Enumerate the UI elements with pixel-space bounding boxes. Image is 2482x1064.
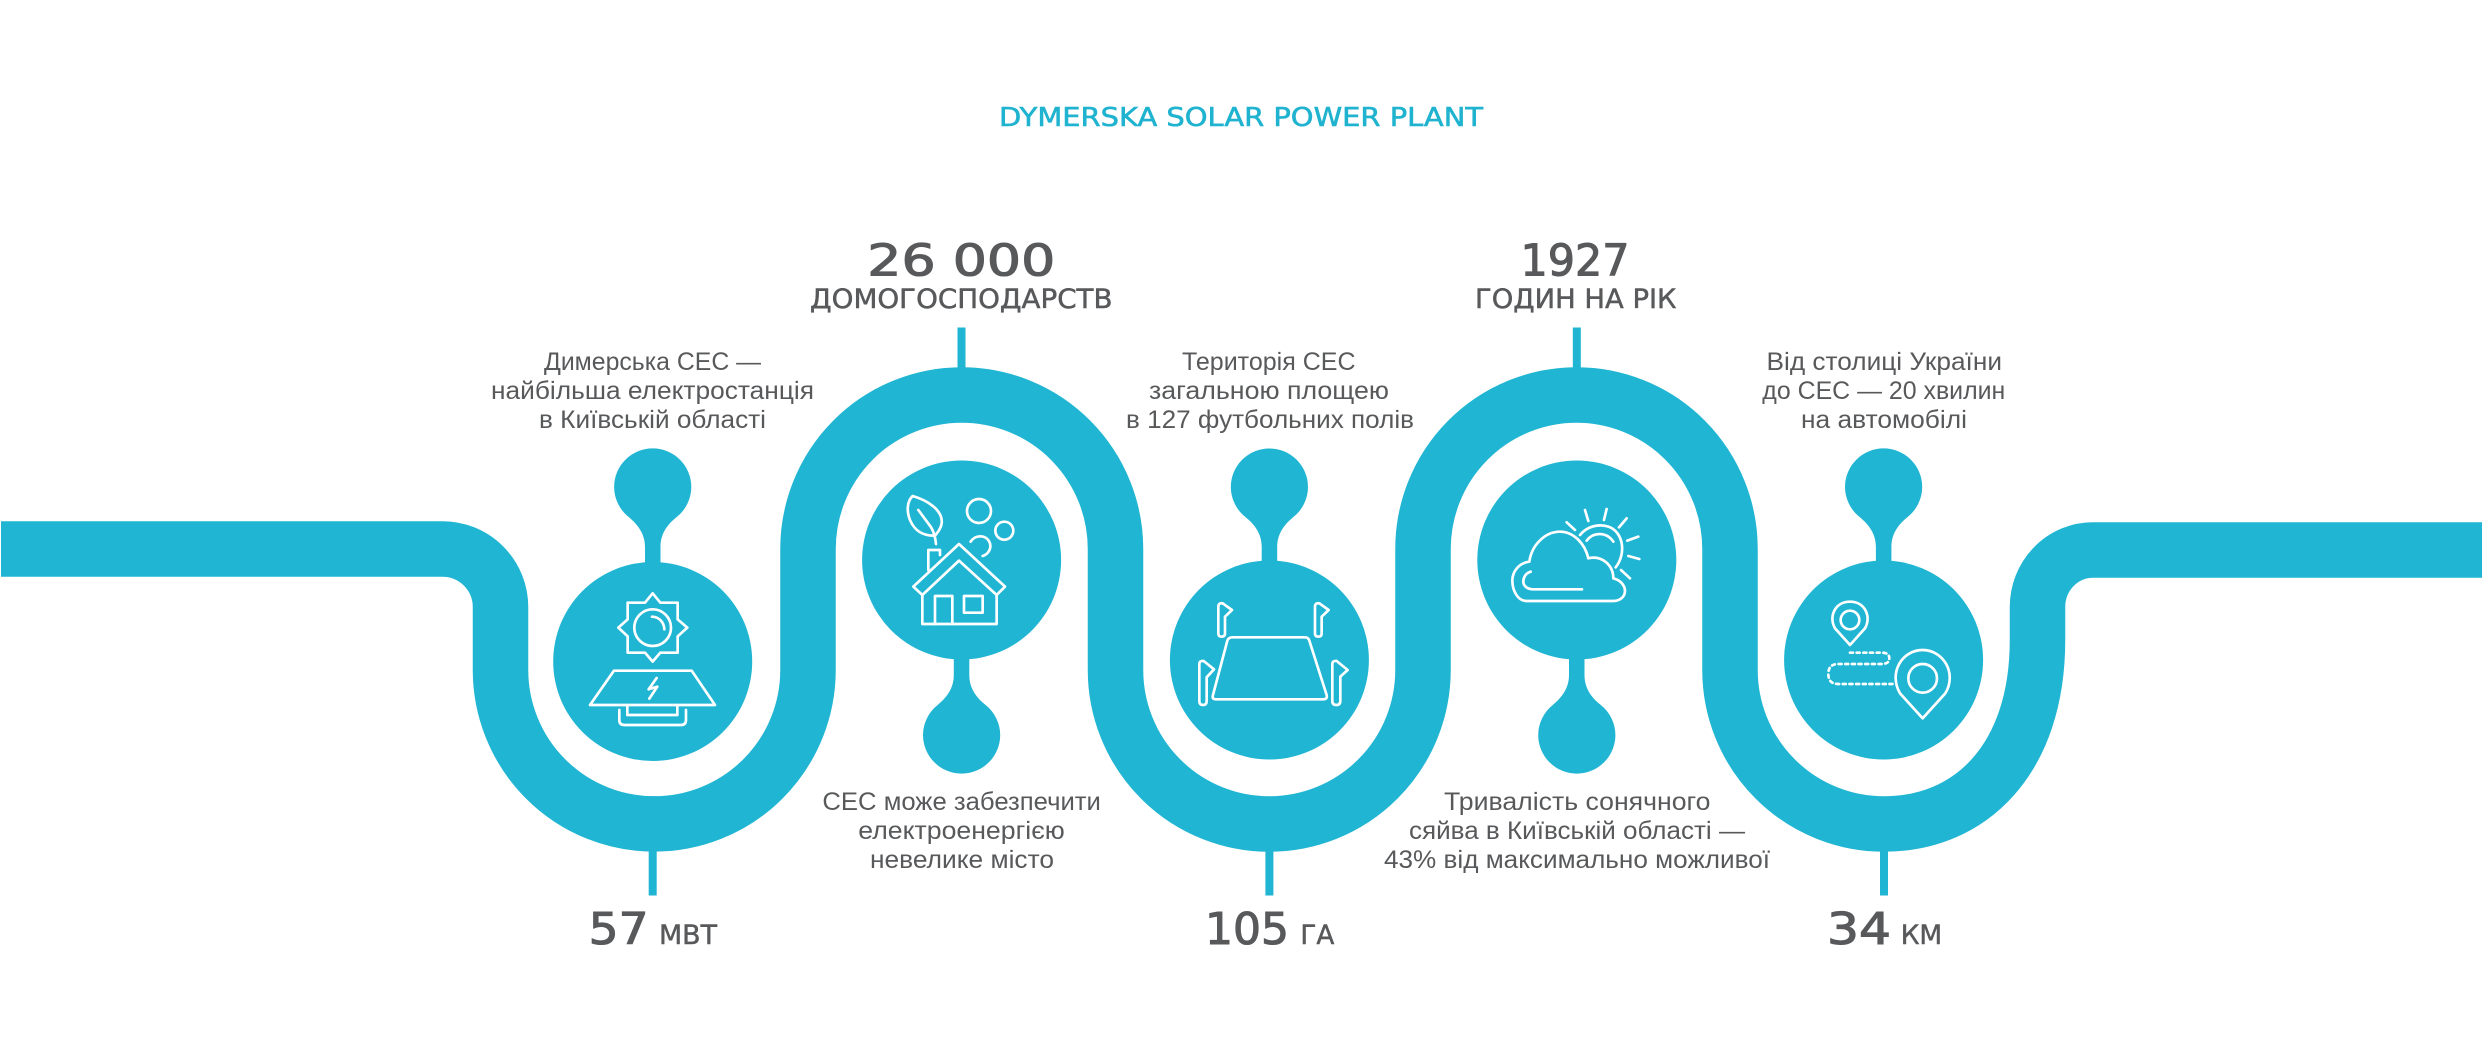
value: 34 km: 34 (1827, 904, 1891, 955)
text: largest power station: в Київській області (539, 406, 766, 434)
stem (1880, 851, 1888, 896)
value: 34 km (1827, 904, 1942, 955)
text: can supply a small town: СЕС може забезпечити (822, 788, 1101, 816)
milestone: 57 MW (491, 348, 814, 955)
unit: households: ДОМОГОСПОДАРСТВ (810, 284, 1112, 315)
title: DYMERSKA SOLAR POWER PLANT (999, 103, 1483, 133)
knob connector (1231, 448, 1308, 570)
unit: hours per year: ГОДИН НА РІК (1475, 284, 1676, 315)
value: 34 km: КМ (1901, 920, 1942, 951)
circle (1170, 560, 1369, 760)
value: 105 ha (1205, 904, 1335, 955)
text: largest power station: найбільша електростанція (491, 377, 814, 405)
value: 105 ha: 105 (1205, 904, 1289, 955)
value: 57 MW: 57 (589, 904, 649, 955)
knob connector (614, 448, 691, 570)
winding ribbon timeline (1, 395, 2482, 824)
stem (1265, 851, 1273, 896)
value: 26 000: 26 000 (867, 236, 1055, 286)
stem (649, 851, 657, 896)
stem (958, 328, 966, 370)
knob connector (1845, 448, 1922, 570)
value: 57 MW: МВТ (659, 920, 718, 951)
text: sunshine duration: 43% від максимально можливої (1384, 846, 1770, 874)
text: can supply a small town (822, 788, 1101, 874)
text: 20 minutes from the capital: на автомобілі (1801, 406, 1967, 434)
milestone: 1927 hours a year (1384, 236, 1770, 874)
icon: route between two map pins (1828, 602, 1950, 718)
circle (862, 460, 1061, 660)
text: can supply a small town: невелике місто (870, 846, 1054, 874)
text: largest power station (491, 348, 814, 434)
knob connector (923, 650, 1000, 774)
knob connector (1538, 650, 1615, 774)
milestone: 34 km (1762, 348, 2005, 955)
icon: house with leaf and smoke (908, 496, 1013, 624)
text: largest power station: Димерська СЕС — (544, 348, 761, 376)
text: can supply a small town: електроенергією (858, 817, 1065, 845)
text: sunshine duration (1384, 788, 1770, 874)
icon: sun over solar panel (590, 593, 715, 725)
circle (553, 562, 752, 761)
circle (1784, 560, 1983, 760)
text: sunshine duration: сяйва в Київській області — (1409, 817, 1745, 845)
icon: cloud and sun (1512, 509, 1639, 601)
text: 20 minutes from the capital: до СЕС — 20 хвилин (1762, 377, 2005, 405)
milestone: 105 ha (1126, 348, 1414, 955)
circle (1477, 460, 1676, 660)
text: territory of 127 football fields: загальною площею (1149, 377, 1389, 405)
text: 20 minutes from the capital: Від столиці України (1766, 348, 2002, 376)
milestone: 26 000 households (810, 236, 1112, 874)
value: 57 MW (589, 904, 718, 955)
stem (1573, 328, 1581, 370)
text: territory of 127 football fields (1126, 348, 1414, 434)
text: territory of 127 football fields: в 127 футбольних полів (1126, 406, 1414, 434)
icon: field with corner flags (1199, 603, 1348, 705)
text: 20 minutes from the capital (1762, 348, 2005, 434)
value: 1927: 1927 (1520, 236, 1630, 286)
text: sunshine duration: Тривалість сонячного (1444, 788, 1710, 816)
text: territory of 127 football fields: Територія СЕС (1182, 348, 1356, 376)
value: 105 ha: ГА (1300, 920, 1335, 951)
